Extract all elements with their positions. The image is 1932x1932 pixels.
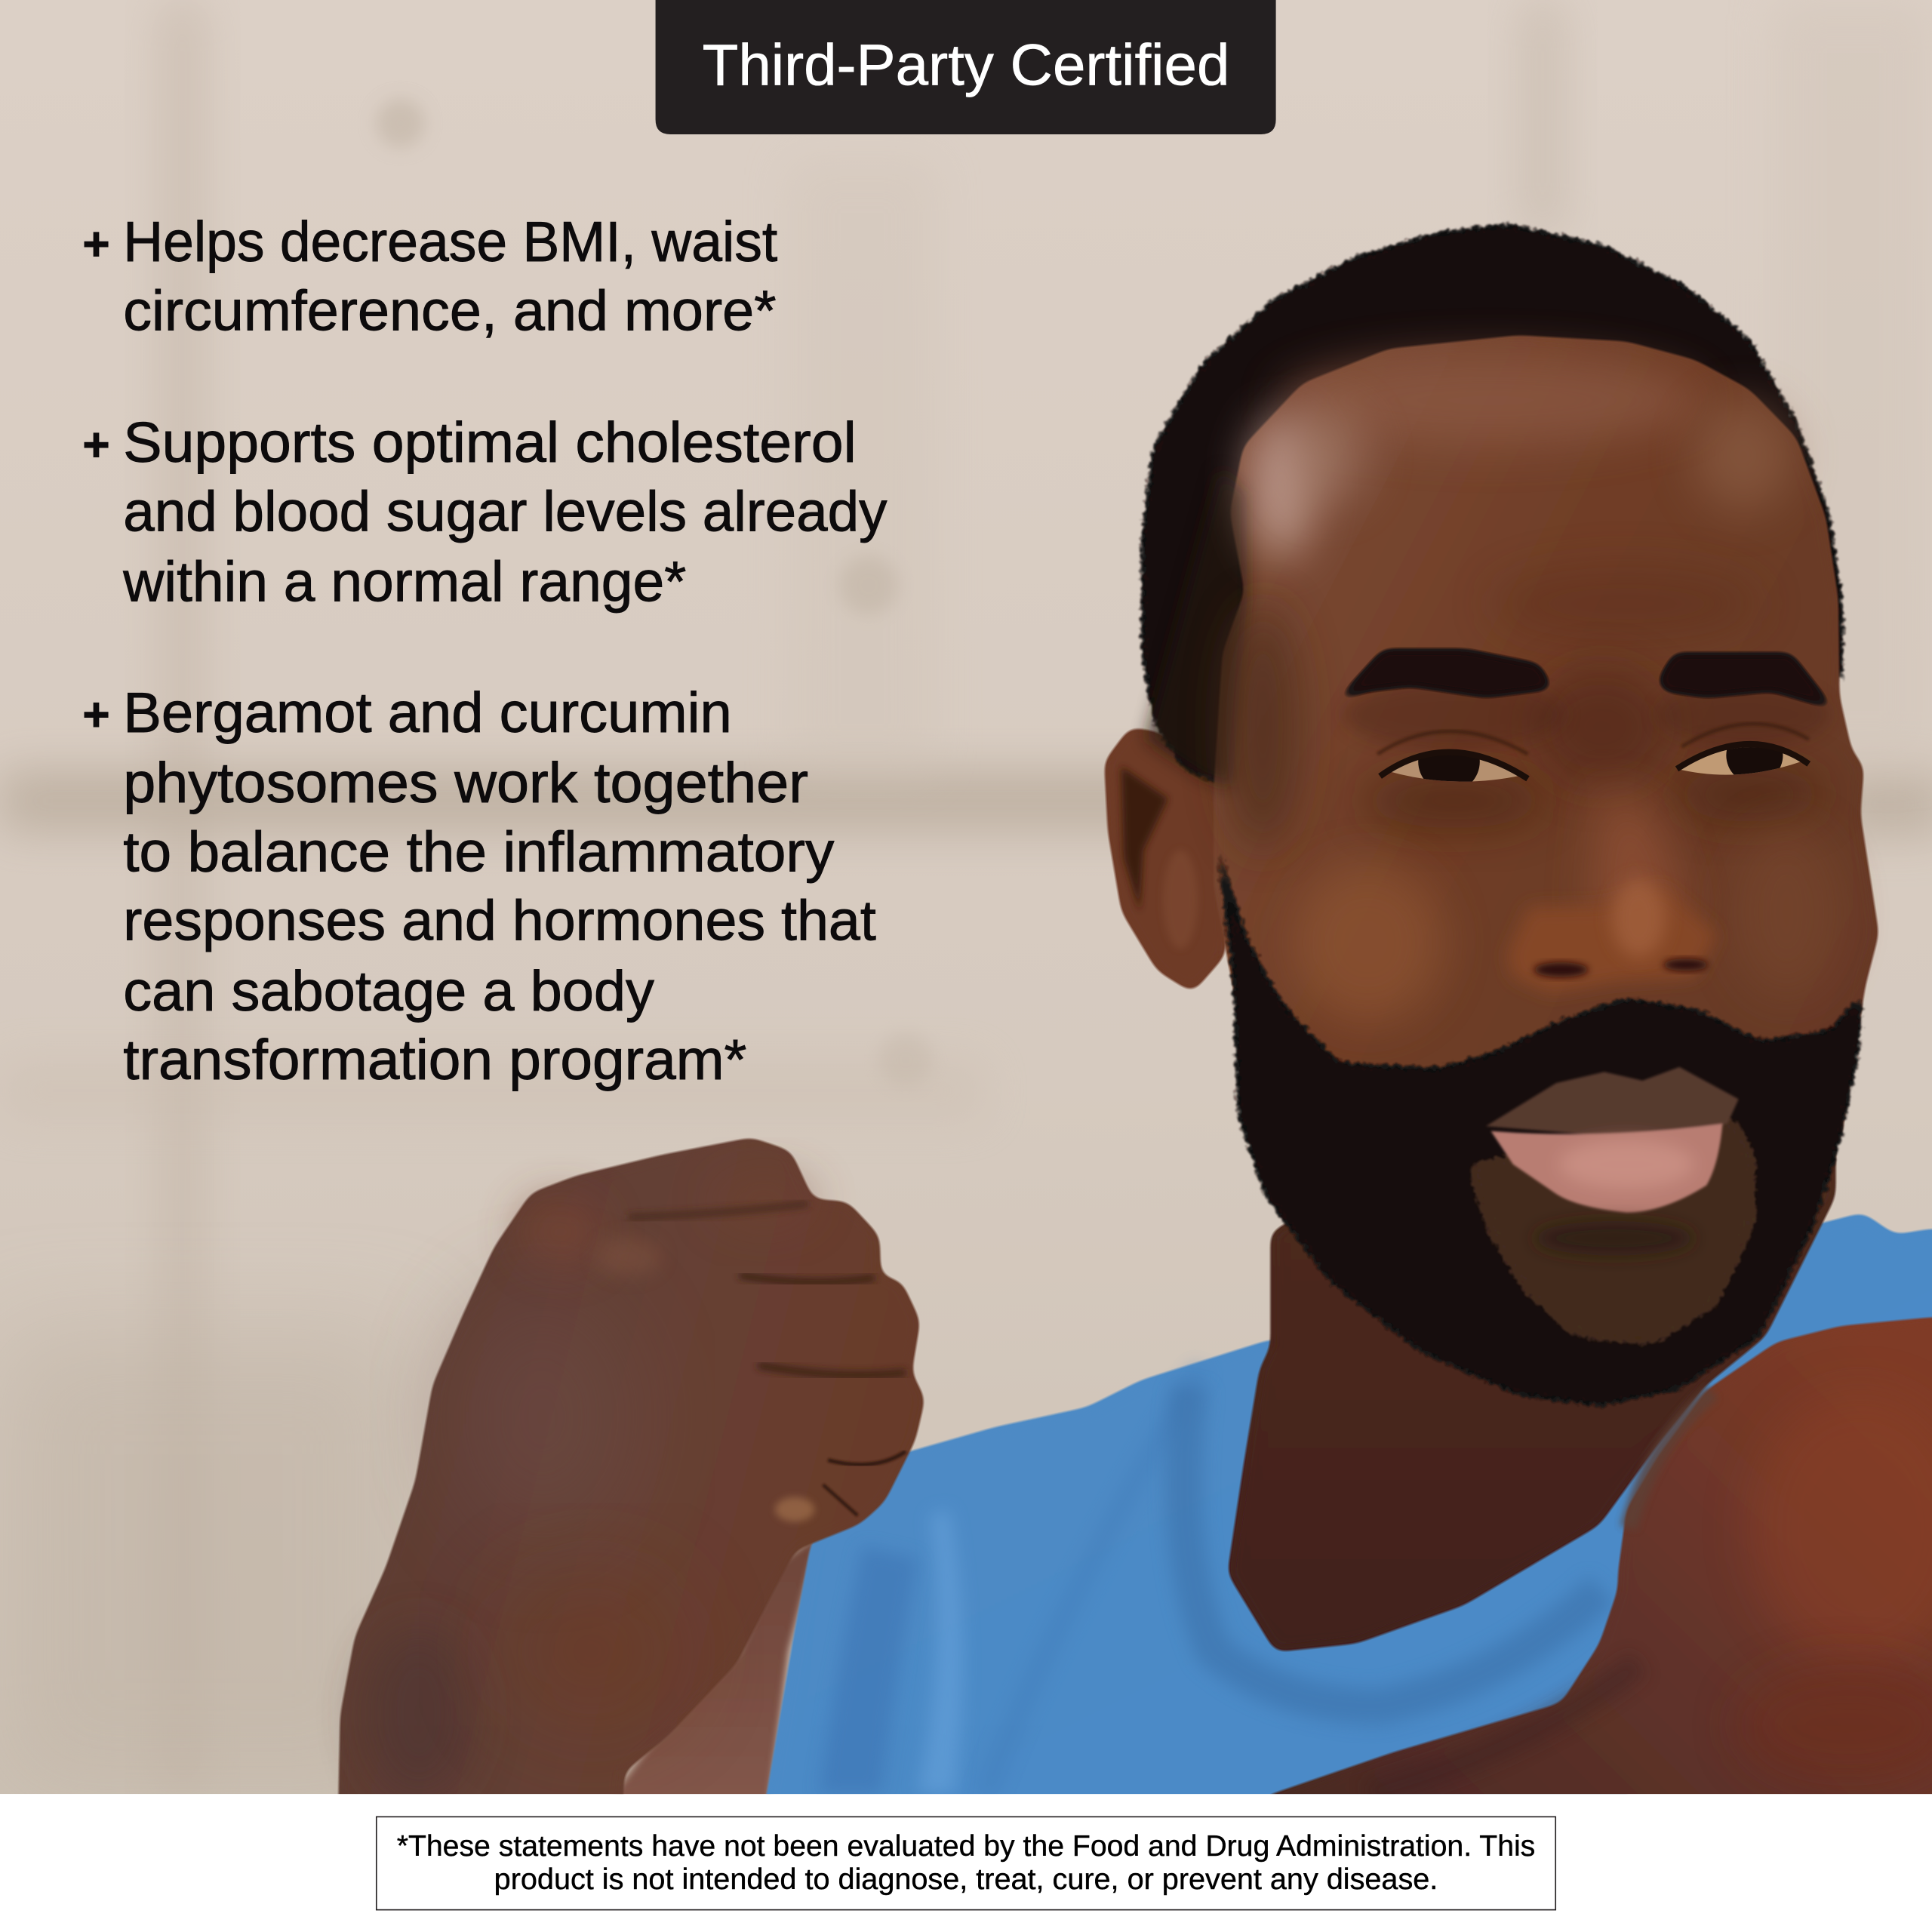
benefit 3: responses and hormones that <box>123 889 876 952</box>
header badge <box>656 0 1276 134</box>
lips <box>1486 1067 1739 1256</box>
eyebrows <box>1331 648 1838 712</box>
head and face <box>1146 335 1879 1232</box>
hair silhouette <box>1141 223 1843 789</box>
benefit 1: Helps decrease BMI, waist <box>123 210 777 273</box>
benefit 1: + <box>82 218 110 270</box>
badge title: Third-Party Certified <box>703 34 1229 98</box>
benefit 3: phytosomes work together <box>123 751 808 814</box>
benefit 1: circumference, and more* <box>123 279 777 343</box>
ear <box>1104 727 1226 993</box>
benefit 2: within a normal range* <box>122 550 686 614</box>
benefits list <box>82 210 888 1091</box>
right eye <box>1677 724 1809 783</box>
benefit 2: + <box>82 420 110 472</box>
benefit 2 <box>82 411 888 614</box>
disclaimer text: *These statements have not been evaluated by the Food and Drug Administration. This <box>397 1830 1535 1863</box>
left eye <box>1377 731 1527 792</box>
benefit 3: can sabotage a body <box>123 959 654 1023</box>
benefit 3 <box>82 681 876 1091</box>
back arm behind hand <box>611 1543 814 1795</box>
benefit 2: Supports optimal cholesterol <box>123 411 857 474</box>
benefit 3: to balance the inflammatory <box>123 820 835 883</box>
disclaimer box <box>377 1817 1555 1910</box>
nose <box>1507 789 1718 993</box>
face shading <box>1281 356 1700 445</box>
eyes <box>1377 724 1809 792</box>
chin patch <box>1466 1115 1756 1346</box>
blue shirt <box>761 1213 1932 1823</box>
benefit 2: and blood sugar levels already <box>123 480 888 543</box>
hair fade at temple <box>1146 468 1247 789</box>
beard <box>1214 803 1866 1407</box>
benefit 3: transformation program* <box>123 1028 746 1091</box>
right shoulder <box>1270 1316 1932 1795</box>
disclaimer text: product is not intended to diagnose, treat, cure, or prevent any disease. <box>494 1863 1438 1896</box>
neck <box>1227 1134 1836 1652</box>
benefit 3: + <box>82 689 110 741</box>
raised fist <box>337 1137 925 1836</box>
benefit 1 <box>82 210 777 343</box>
benefit 3: Bergamot and curcumin <box>123 681 732 744</box>
disclaimer text <box>397 1830 1535 1896</box>
